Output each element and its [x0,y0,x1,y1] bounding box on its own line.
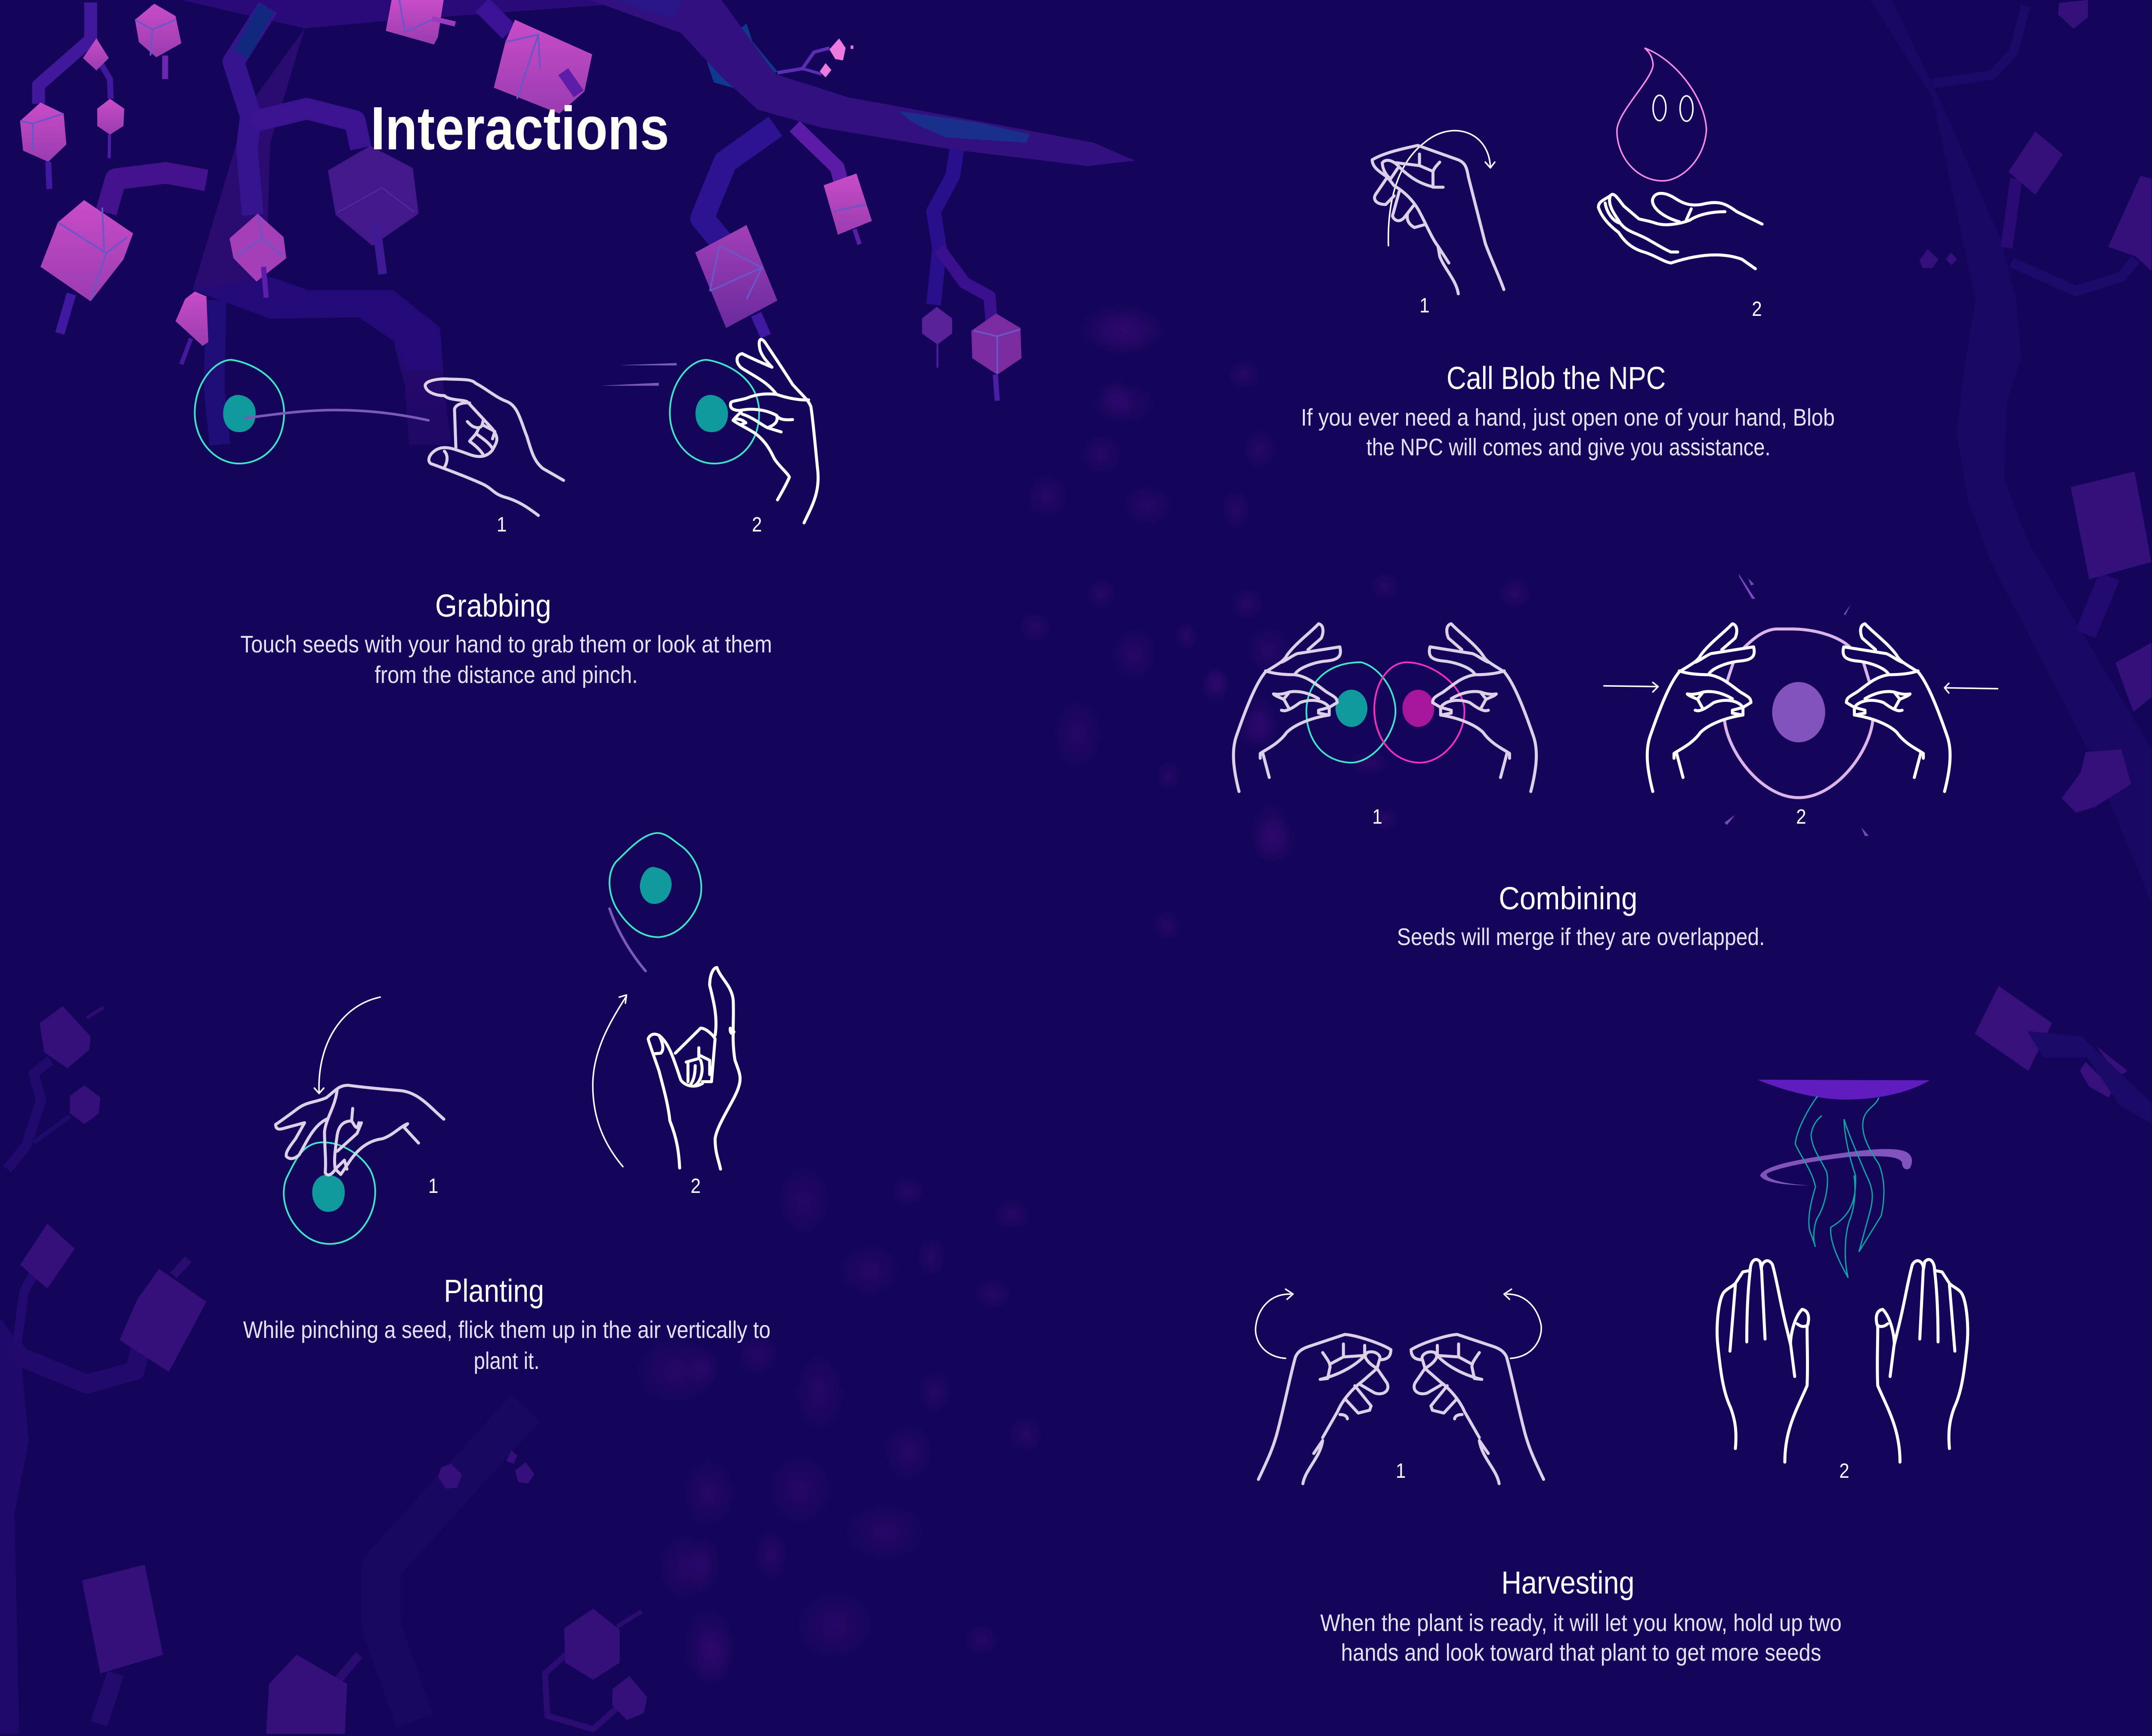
description: Call Blob: the NPC will comes and give you assistance. [1367,434,1771,461]
merged seed [1772,682,1825,742]
step number 2: 2 [1839,1459,1849,1483]
arrow: downward [314,997,380,1093]
gaze trail [245,410,428,420]
background: dim tree, upper right [1870,0,2152,902]
seed [223,395,256,432]
hand, step 1 [1372,145,1504,294]
left hand, step 1 [1258,1334,1391,1484]
pinch hand, step 2 [730,340,818,523]
background: bright tree, top left [20,0,604,445]
description: Harvesting [1320,1609,1842,1666]
background: blurred glow particles [634,302,1532,1687]
step number 2: 2 [1796,805,1806,828]
right hand, step 2 [1843,624,1950,791]
right open hand, step 2 [1876,1260,1968,1462]
description: Call Blob: If you ever need a hand, just open one of your hand, Blob [1301,404,1835,431]
left hand, step 2 [1647,624,1754,791]
seed ring [670,360,759,463]
seed ring, step 2 [609,833,701,937]
seed ring [195,360,284,463]
step number 1: 1 [1396,1459,1406,1483]
description: Combining: Seeds will merge if they are overlapped. [1397,924,1765,951]
right hand, step 1 [1411,1334,1543,1484]
flick trail [609,908,646,971]
step number 2: 2 [691,1174,701,1198]
step number 1: 1 [1372,805,1382,828]
panel: harvesting [1255,1080,1968,1666]
seed ring, step 1 [284,1142,375,1244]
step number 1: 1 [497,513,507,536]
panel: call Blob the NPC [1301,48,1835,461]
step number 2: 2 [1752,297,1762,321]
hand, step 1 [275,1085,444,1175]
speed lines [600,363,677,386]
lantern tails [48,162,49,189]
illustration: combining steps [1234,574,1997,836]
merged seed ring [1725,629,1873,798]
pinch hand, step 1 [425,379,563,516]
description: Grabbing: Touch seeds with your hand to grab them or look at them [241,631,772,658]
left hand, step 1 [1234,624,1340,791]
magenta seed ring [1374,662,1465,763]
step number 2: 2 [752,513,762,536]
description: Call Blob [1301,404,1835,461]
panel: combining [1234,574,1997,951]
description: Harvesting: hands and look toward that plant to get more seeds [1341,1639,1821,1666]
icon: Blob NPC [1617,48,1707,181]
plant dish [1758,1080,1929,1100]
heading: Harvesting: Harvesting [1501,1565,1634,1600]
seed, step 2 [640,867,672,904]
teal vapour strands [1795,1096,1884,1278]
title: Interactions [371,95,669,163]
background: dim tree, lower right [1975,986,2152,1124]
teal seed [1336,690,1367,727]
arrow: pushing in from left [1604,683,1658,692]
background: dim tree, bottom left [0,1006,647,1734]
arrow: wrist flip [1388,131,1495,246]
description: Grabbing [241,631,772,689]
seed [696,395,728,432]
illustration: harvesting steps [1255,1080,1968,1484]
description: Planting [243,1316,770,1375]
description: Planting: plant it. [474,1347,540,1375]
panel: planting [243,833,770,1375]
sparks [1725,574,1869,836]
left open hand, step 2 [1717,1260,1809,1462]
illustration: call Blob steps [1372,48,1762,294]
open hand, step 2 [1599,193,1762,269]
illustration: planting step 1 and 2 [275,833,740,1244]
arrow: pushing in from right [1945,683,1997,693]
purple swirl [1760,1149,1912,1186]
illustration: grabbing step 1 and 2 [195,340,818,523]
heading: Planting: Planting [444,1273,544,1309]
heading: Call Blob the NPC: Call Blob the NPC [1447,360,1666,396]
heading: Grabbing: Grabbing [435,588,551,624]
description: Planting: While pinching a seed, flick them up in the air vertically to [243,1316,770,1344]
heading: Combining: Combining [1499,880,1637,916]
Blob eyes [1653,95,1693,121]
arrow: upward [593,995,627,1167]
magenta seed [1402,690,1434,727]
seed, step 1 [312,1174,345,1212]
description: Harvesting: When the plant is ready, it will let you know, hold up two [1320,1609,1842,1637]
right hand, step 1 [1429,624,1537,791]
panel: grabbing [195,340,818,689]
arrow: left rotation [1255,1289,1293,1358]
step number 1: 1 [428,1174,438,1198]
description: Grabbing: from the distance and pinch. [375,661,638,689]
teal seed ring [1306,662,1395,763]
lanterns [20,0,592,346]
step number 1: 1 [1419,293,1430,317]
arrow: right rotation [1504,1289,1541,1358]
background: main branch, top centre [590,0,1135,401]
lantern edges [135,20,176,30]
hand, step 2 [648,967,740,1169]
